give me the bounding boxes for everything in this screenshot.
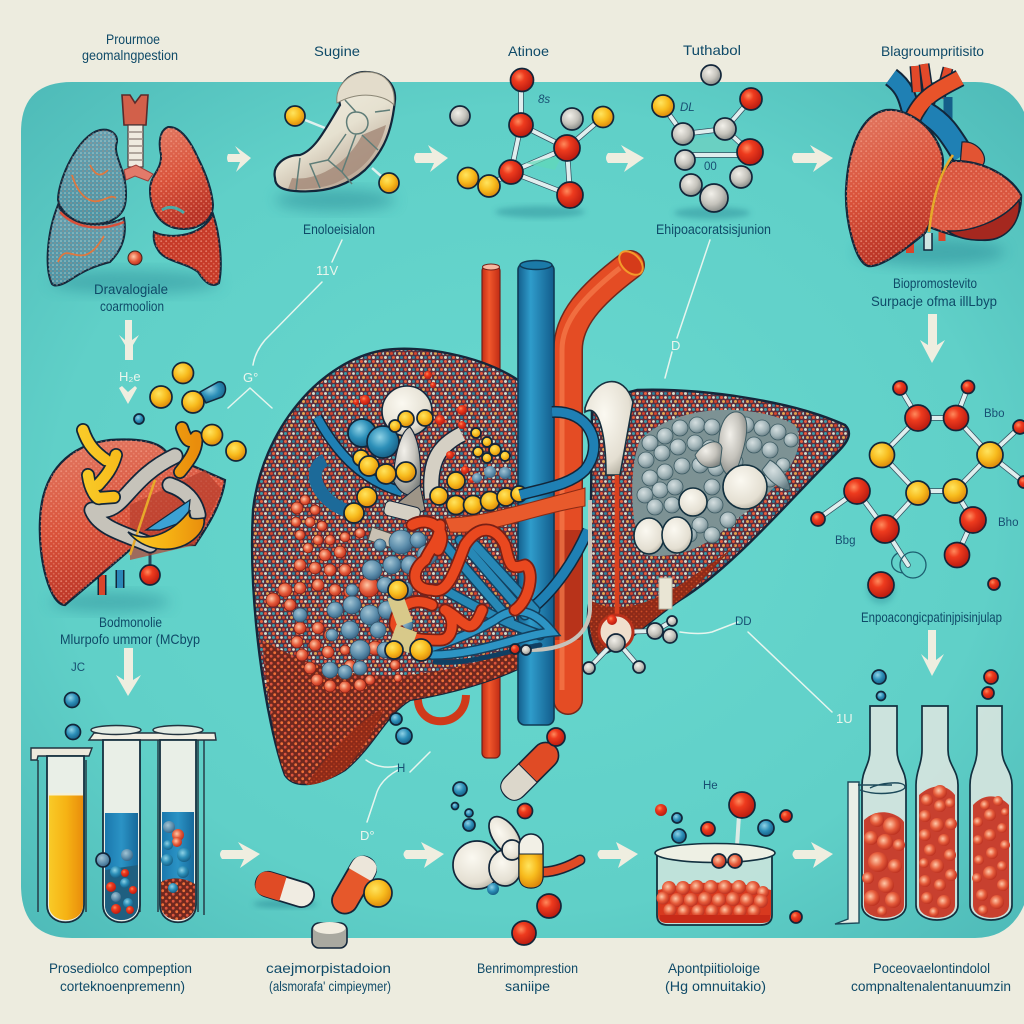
label: right tubes xyxy=(851,960,1011,994)
yellow and other balls xyxy=(134,362,246,585)
heading: lungs top xyxy=(82,31,178,63)
molecule two xyxy=(652,65,763,219)
white sphere xyxy=(382,386,432,436)
tube one xyxy=(858,706,906,920)
red beads layer xyxy=(656,880,771,923)
yellow ball xyxy=(285,106,305,126)
callout: top left: 11V xyxy=(316,263,338,278)
lower ring xyxy=(418,695,466,721)
arrow: molecule two to liver xyxy=(792,145,833,172)
scattered red beads xyxy=(353,371,475,483)
big curved red tube xyxy=(562,247,647,700)
arrow: beaker to tubes xyxy=(792,842,833,868)
central liver right lobe xyxy=(588,390,849,655)
small label: JC xyxy=(71,662,85,674)
blue central tube xyxy=(518,260,554,725)
small label: 8s xyxy=(538,94,550,106)
label: liver xyxy=(871,275,997,309)
vessels xyxy=(891,64,985,253)
tube three xyxy=(970,706,1012,920)
tablet xyxy=(312,922,347,948)
main lobe xyxy=(846,110,943,266)
label: left tubes: Prosediolco compeption xyxy=(49,960,192,976)
label: molecule two: Ehipoacoratsisjunion xyxy=(656,221,771,237)
panel: lungs step xyxy=(48,95,221,294)
arrow: molecule one to two xyxy=(606,145,644,172)
callout: bottom of liver: D° xyxy=(360,828,375,843)
organ body xyxy=(275,72,395,191)
label: beaker: (Hg omnuitakio) xyxy=(665,978,766,994)
blue curve xyxy=(317,417,402,492)
label: beaker xyxy=(665,960,766,994)
small orange ball xyxy=(128,251,142,265)
yellow tubes xyxy=(83,428,196,498)
heading: molecule two: Tuthabol xyxy=(683,42,741,58)
white horn xyxy=(393,427,421,495)
panel: right ring molecule xyxy=(811,380,1024,604)
callout: bottom of liver: H xyxy=(397,763,405,775)
rack rails xyxy=(38,740,204,915)
white clump xyxy=(453,811,580,895)
pill horizontal xyxy=(253,869,317,910)
heading: lungs top: geomalngpestion xyxy=(82,47,178,63)
panel: left test tubes xyxy=(31,692,216,922)
panel: digestive organ step xyxy=(275,72,399,211)
yellow lower band xyxy=(128,510,204,549)
rack top xyxy=(89,733,216,740)
heading: molecule one: Atinoe xyxy=(508,43,549,59)
small label: Bbo xyxy=(984,408,1004,420)
orange-red tapered tube and blue loop xyxy=(445,412,594,650)
heading: organ: Sugine xyxy=(314,43,360,59)
label: pills: (alsmorafa' cimpieymer) xyxy=(269,978,391,994)
arrow: liver down xyxy=(920,314,945,363)
red bead cluster: left xyxy=(266,495,402,693)
grey band xyxy=(92,456,198,545)
arrow: tubes to pills xyxy=(220,842,260,868)
yellow capsule xyxy=(519,834,543,888)
callout: molecule two xyxy=(665,240,710,378)
small label: Bbg xyxy=(835,535,855,547)
right lung lower lobe xyxy=(154,214,221,285)
yellow ball xyxy=(379,173,399,193)
inner organ cluster: top left xyxy=(315,371,527,548)
callout: right liver xyxy=(680,616,853,726)
hanging vessels xyxy=(102,545,150,595)
shell shape xyxy=(719,412,747,476)
blue shard xyxy=(146,500,190,530)
red squiggle tube xyxy=(395,522,530,640)
panel: capsule and clump xyxy=(452,728,580,945)
label: left liver: Mlurpofo ummor (MCbyp xyxy=(60,631,200,647)
central liver left lobe xyxy=(252,349,565,785)
panel: right test tubes xyxy=(835,670,1012,924)
small label: Bho xyxy=(998,517,1018,529)
ball bond lines xyxy=(295,116,389,183)
callout: right liver: DD xyxy=(735,616,752,628)
right lung upper lobe xyxy=(150,127,213,229)
label: organ: Enoloeisialon xyxy=(303,221,375,237)
tube blue xyxy=(96,740,140,922)
central vessels behind liver xyxy=(418,264,500,758)
small label: He xyxy=(703,780,718,792)
blue-grey bead cluster xyxy=(293,530,437,679)
callout: top left: G° xyxy=(243,370,258,385)
label: beaker: Apontpiitioloige xyxy=(668,960,760,976)
small label: DL xyxy=(680,102,695,114)
tube yellow xyxy=(31,748,92,922)
label: left liver xyxy=(60,614,200,647)
right lobe xyxy=(929,161,1021,240)
molecule one xyxy=(450,68,614,218)
label: lungs: Dravalogiale xyxy=(94,281,168,297)
label: clump: saniipe xyxy=(505,978,550,994)
label: pills: caejmorpistadoion xyxy=(266,960,391,976)
arrow: ring molecule down xyxy=(921,630,944,676)
panel: left liver with yellow tubes xyxy=(40,362,246,612)
small label: 00 xyxy=(704,161,717,173)
grey wedge xyxy=(395,485,425,520)
heading: lungs top: Prourmoe xyxy=(106,31,160,47)
label: clump: Benrimomprestion xyxy=(477,960,578,976)
label: right tubes: compnaltenalentanuumzin xyxy=(851,978,1011,994)
arrow: lungs to stomach xyxy=(227,146,251,172)
label: liver: Biopromostevito xyxy=(893,275,977,291)
grey arch xyxy=(431,434,462,498)
white duct cap xyxy=(585,382,633,622)
label: pills xyxy=(266,960,391,994)
tube blue-red xyxy=(160,740,196,922)
panel: pills xyxy=(253,852,392,948)
pill diagonal xyxy=(327,852,381,918)
label: right tubes: Poceovaelontindolol xyxy=(873,960,990,976)
small arrow with label: H₂e xyxy=(119,369,141,384)
striped strip under right lobe xyxy=(659,578,672,609)
grey-blue minor beads xyxy=(472,466,511,483)
tube two xyxy=(916,706,958,920)
label: left liver: Bodmonolie xyxy=(99,614,162,630)
lower dangling blue balls xyxy=(390,713,412,744)
right grey cluster xyxy=(632,410,799,556)
label: lungs xyxy=(94,281,168,314)
label: clump xyxy=(477,960,578,994)
thin duct xyxy=(130,480,155,555)
arrow: pills to clump xyxy=(404,842,444,868)
red tube left xyxy=(482,264,500,758)
left lung lower lobe xyxy=(48,205,125,285)
arrow: lungs down xyxy=(119,320,139,360)
blue tube chunk xyxy=(315,460,345,510)
stand xyxy=(835,782,859,924)
bottom yellow beads and small beads xyxy=(385,580,531,661)
label: liver: Surpacje ofma illLbyp xyxy=(871,293,997,309)
label: left tubes: corteknoenpremenn) xyxy=(60,978,185,994)
callout: right liver: 1U xyxy=(836,711,853,726)
left lung upper lobe xyxy=(58,130,126,224)
small arrow with label xyxy=(119,369,141,404)
rack caps xyxy=(91,726,203,734)
heading: liver: Blagroumpritisito xyxy=(881,43,984,59)
callout: top left xyxy=(228,240,342,408)
tablet xyxy=(383,500,421,523)
blue tube bundle xyxy=(430,540,552,662)
trachea xyxy=(122,95,153,181)
panel: liver with heart vessels xyxy=(846,64,1021,266)
liver body xyxy=(40,440,225,605)
callout: bottom of liver xyxy=(360,752,430,843)
arrow: left liver down xyxy=(116,648,141,696)
label: left tubes xyxy=(49,960,192,994)
small molecule at liver hilum xyxy=(583,615,677,674)
capsule diagonal xyxy=(496,737,564,805)
large white spheres xyxy=(634,465,767,554)
arrow: organ to molecule xyxy=(414,145,448,172)
callout: molecule two: D xyxy=(671,338,680,353)
arrow: clump to beaker xyxy=(598,842,638,868)
panel: beaker xyxy=(655,792,802,925)
label: lungs: coarmoolion xyxy=(100,298,164,314)
bile duct line xyxy=(929,155,953,232)
yellow bead chains xyxy=(344,410,527,523)
